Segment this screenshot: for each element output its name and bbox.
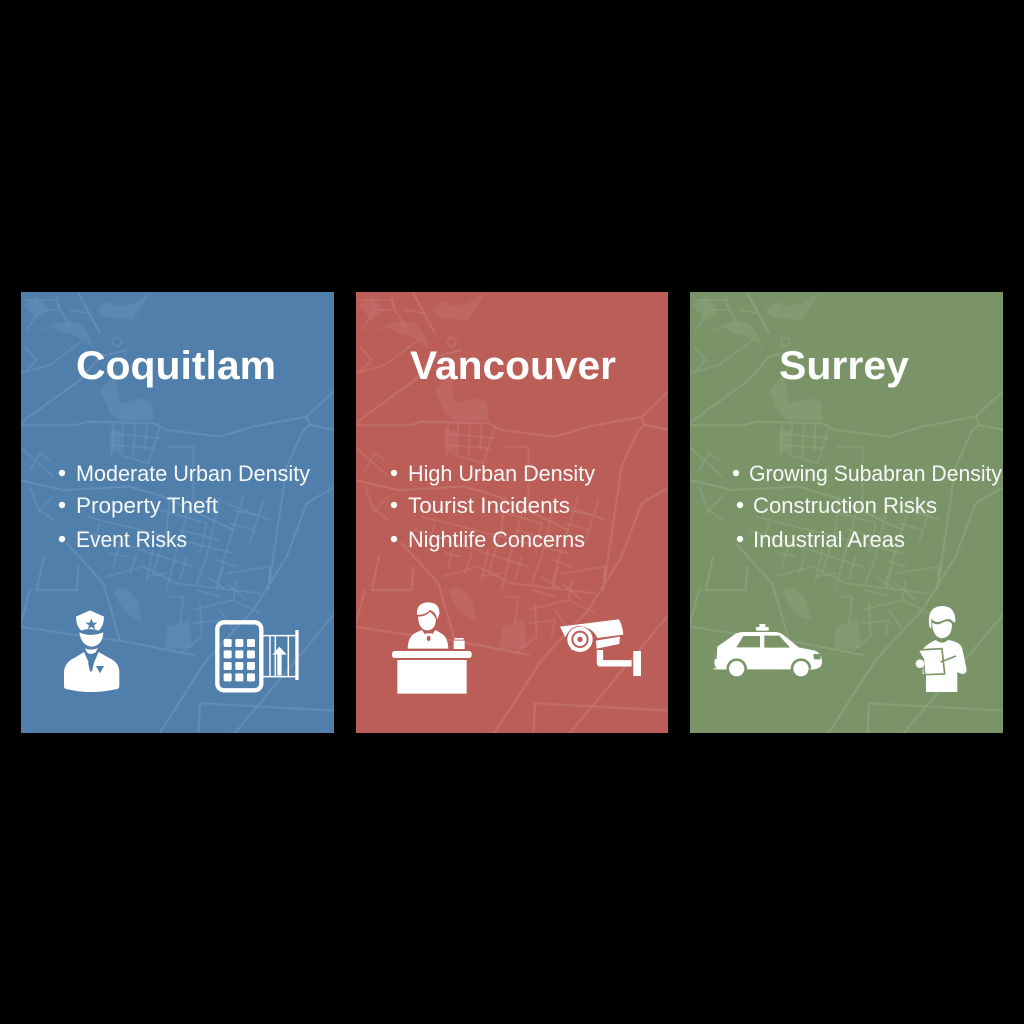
bullet list: Surrey: [733, 461, 1002, 552]
panel: Vancouver: [355, 290, 670, 735]
icon: person with clipboard: [916, 606, 967, 692]
bullet list: Surrey: Industrial Areas: [753, 527, 905, 552]
bullet list: Vancouver: Tourist Incidents: [408, 493, 570, 518]
heading: Vancouver: Vancouver: [410, 344, 616, 388]
bullet list: Coquitlam: [59, 461, 310, 552]
map background: Vancouver: [355, 290, 670, 735]
bullet list: Coquitlam: Property Theft: [76, 493, 218, 518]
icon: security camera: [560, 619, 641, 676]
bullet list: Vancouver: High Urban Density: [408, 461, 595, 486]
icon: reception desk attendant: [392, 602, 472, 694]
icon: keypad and gate: [217, 622, 297, 690]
icon: taxi car: [713, 624, 822, 679]
bullet list: Surrey: Growing Subabran Density: [749, 461, 1002, 486]
heading: Coquitlam: Coquitlam: [76, 344, 276, 388]
bullet list: Vancouver: [391, 461, 595, 552]
icon: police officer: [64, 610, 119, 692]
bullet list: Vancouver: Nightlife Concerns: [408, 527, 585, 552]
panel: Coquitlam: [20, 290, 335, 735]
panel: Surrey: [689, 290, 1004, 735]
map background: Surrey: [689, 290, 1004, 735]
heading: Surrey: Surrey: [779, 344, 910, 388]
bullet list: Surrey: Construction Risks: [753, 493, 937, 518]
map background: Coquitlam: [20, 290, 335, 735]
bullet list: Coquitlam: Moderate Urban Density: [76, 461, 310, 486]
bullet list: Coquitlam: Event Risks: [76, 527, 187, 552]
